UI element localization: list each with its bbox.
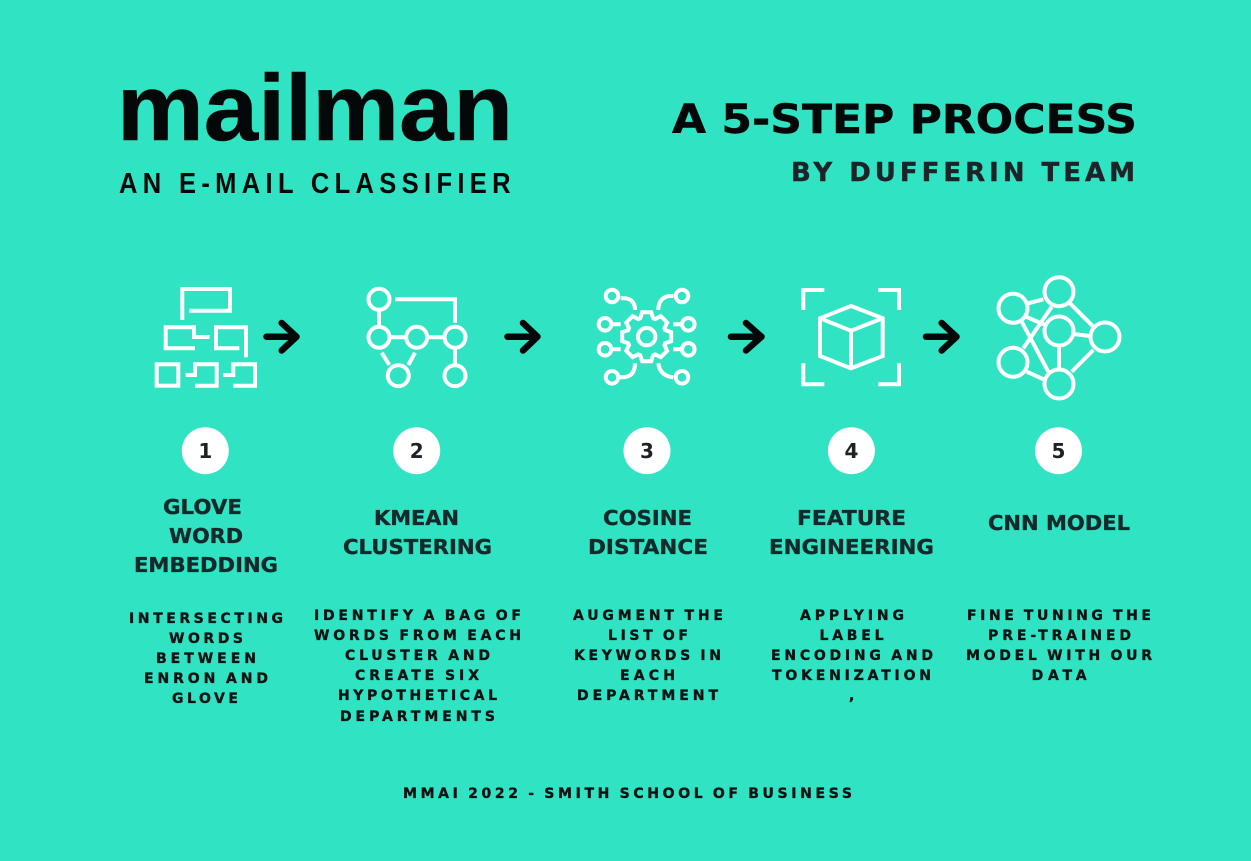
step description 3: DEPARTMENT bbox=[577, 688, 718, 704]
step title: feature engineering bbox=[769, 506, 934, 559]
step 4 bbox=[769, 290, 934, 704]
step description 4 bbox=[771, 608, 933, 704]
step description 1: BETWEEN bbox=[156, 651, 256, 667]
step description 2: DEPARTMENTS bbox=[340, 709, 495, 725]
number badge 1: 1 bbox=[198, 439, 212, 463]
step description 5: DATA bbox=[1032, 668, 1087, 684]
step description 4: LABEL bbox=[820, 628, 884, 644]
step title: kmean clustering: CLUSTERING bbox=[343, 535, 492, 559]
step description 5: MODEL WITH OUR bbox=[966, 648, 1152, 664]
arrow: step 4 to 5 bbox=[926, 323, 956, 350]
step description 1: GLOVE bbox=[172, 691, 238, 707]
icon: node cluster graph bbox=[368, 289, 466, 386]
icon: hierarchy of boxes bbox=[157, 289, 255, 386]
step description 3: EACH bbox=[620, 668, 675, 684]
step description 5: PRE-TRAINED bbox=[988, 628, 1131, 644]
step description 5: FINE TUNING THE bbox=[967, 608, 1151, 624]
icon: neural network bbox=[998, 277, 1120, 398]
step description 3: LIST OF bbox=[608, 628, 688, 644]
step 3 bbox=[573, 290, 723, 704]
step description 1 bbox=[129, 611, 283, 707]
step description 4: ENCODING AND bbox=[771, 648, 933, 664]
icon: cube in viewfinder bbox=[803, 290, 899, 384]
step title: kmean clustering: KMEAN bbox=[374, 506, 459, 530]
step title: cnn model: CNN MODEL bbox=[988, 511, 1130, 535]
step title: glove word embedding: EMBEDDING bbox=[134, 553, 278, 577]
arrow: step 3 to 4 bbox=[731, 323, 762, 350]
step 1 bbox=[129, 289, 283, 707]
step description 2: HYPOTHETICAL bbox=[338, 688, 497, 704]
heading: a 5-step process bbox=[672, 97, 1137, 188]
step description 3 bbox=[573, 608, 723, 704]
byline: by dufferin team: BY DUFFERIN TEAM bbox=[791, 158, 1135, 188]
step title: feature engineering: ENGINEERING bbox=[769, 535, 934, 559]
icon: gear with circuit nodes bbox=[599, 290, 695, 384]
step description 2: CREATE SIX bbox=[355, 668, 479, 684]
number badge 3 bbox=[624, 427, 670, 474]
number badge 4 bbox=[828, 427, 875, 474]
step description 3: KEYWORDS IN bbox=[574, 648, 721, 664]
step title: glove word embedding bbox=[134, 495, 278, 577]
number badge 5: 5 bbox=[1052, 439, 1065, 463]
step title: cosine distance: DISTANCE bbox=[588, 535, 708, 559]
step description 1: ENRON AND bbox=[144, 671, 268, 687]
step description 4: , bbox=[849, 688, 854, 704]
step description 2: CLUSTER AND bbox=[345, 648, 490, 664]
number badge 5 bbox=[1035, 427, 1082, 474]
subtitle: an e-mail classifier: AN E-MAIL CLASSIFIER bbox=[119, 166, 511, 199]
heading: a 5-step process: A 5-STEP PROCESS bbox=[672, 97, 1137, 143]
step title: glove word embedding: GLOVE bbox=[163, 495, 242, 519]
step title: glove word embedding: WORD bbox=[169, 524, 243, 548]
number badge 3: 3 bbox=[640, 439, 654, 463]
step title: kmean clustering bbox=[343, 506, 492, 559]
step 2 bbox=[314, 289, 521, 725]
step description 4: APPLYING bbox=[800, 608, 904, 624]
footer credit: MMAI 2022 - SMITH SCHOOL OF BUSINESS bbox=[403, 786, 852, 802]
number badge 2: 2 bbox=[410, 439, 424, 463]
number badge 4: 4 bbox=[844, 439, 858, 463]
step description 5 bbox=[966, 608, 1152, 684]
step description 4: TOKENIZATION bbox=[772, 668, 931, 684]
step description 2: IDENTIFY A BAG OF bbox=[314, 608, 521, 624]
number badge 2 bbox=[393, 427, 440, 474]
step description 1: INTERSECTING bbox=[129, 611, 283, 627]
step title: cosine distance: COSINE bbox=[603, 506, 692, 530]
logo heading: mailman: mailman bbox=[117, 55, 513, 160]
step title: feature engineering: FEATURE bbox=[797, 506, 906, 530]
arrow: step 1 to 2 bbox=[266, 323, 296, 350]
step description 1: WORDS bbox=[169, 631, 243, 647]
step description 3: AUGMENT THE bbox=[573, 608, 723, 624]
number badge 1 bbox=[182, 427, 229, 474]
arrow: step 2 to 3 bbox=[508, 323, 538, 350]
step description 2: WORDS FROM EACH bbox=[314, 628, 521, 644]
step 5 bbox=[966, 277, 1152, 684]
step description 2 bbox=[314, 608, 521, 725]
step title: cosine distance bbox=[588, 506, 708, 559]
